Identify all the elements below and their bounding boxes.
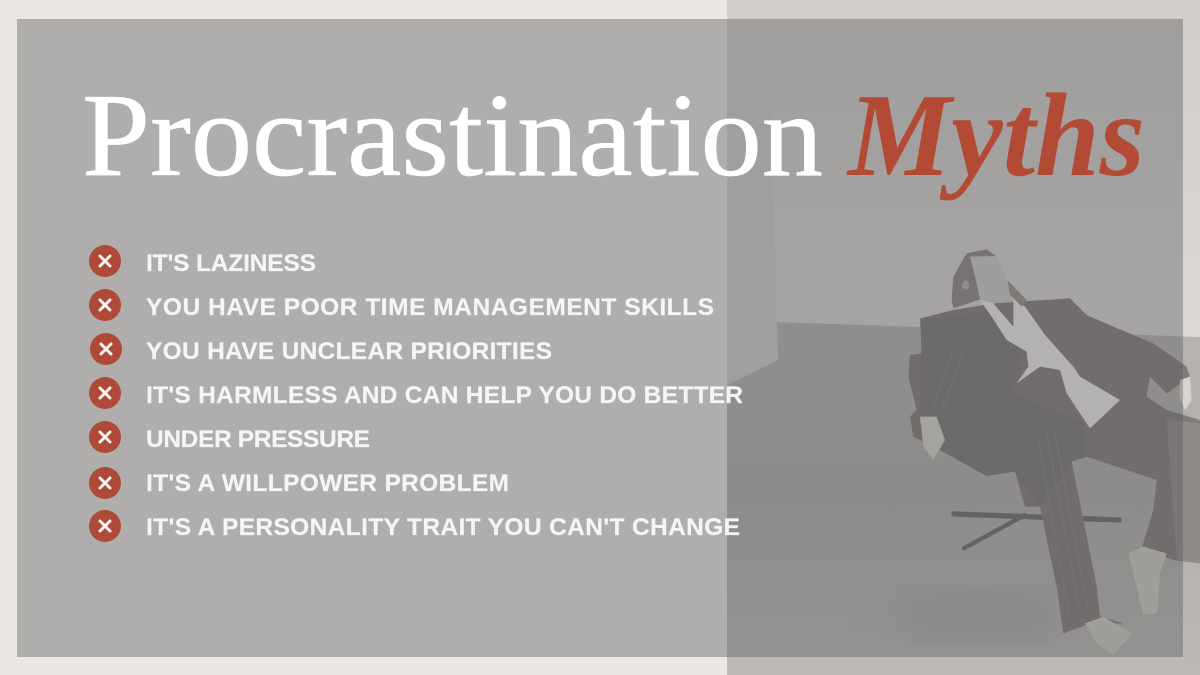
floor gap between arm and torso: [1147, 377, 1167, 410]
myth 4 continued: [89, 421, 370, 453]
chair base: [954, 514, 1119, 548]
suit and chair: [908, 298, 1200, 633]
myth 2: YOU HAVE POOR TIME MANAGEMENT SKILLS: [146, 294, 714, 321]
myth 5: IT'S A WILLPOWER PROBLEM: [146, 470, 509, 497]
pinstripes: [933, 350, 1088, 620]
photo: woman reclining in a chair: [727, 0, 1200, 675]
hair and neck: [952, 249, 997, 308]
myth 4: IT'S HARMLESS AND CAN HELP YOU DO BETTER: [146, 382, 743, 409]
myth 1: IT'S LAZINESS: [146, 250, 316, 277]
myth 3: YOU HAVE UNCLEAR PRIORITIES: [146, 338, 552, 365]
myth 1: [89, 245, 316, 277]
myth list: [89, 245, 743, 542]
myth 4 continued: UNDER PRESSURE: [146, 426, 370, 453]
shirt: [980, 297, 1120, 428]
hands and feet: [920, 417, 945, 460]
title: Myths: [846, 69, 1145, 201]
myth 6: IT'S A PERSONALITY TRAIT YOU CAN'T CHANGE: [146, 514, 740, 541]
title: Procrastination: [82, 69, 823, 201]
title: [82, 69, 1145, 201]
